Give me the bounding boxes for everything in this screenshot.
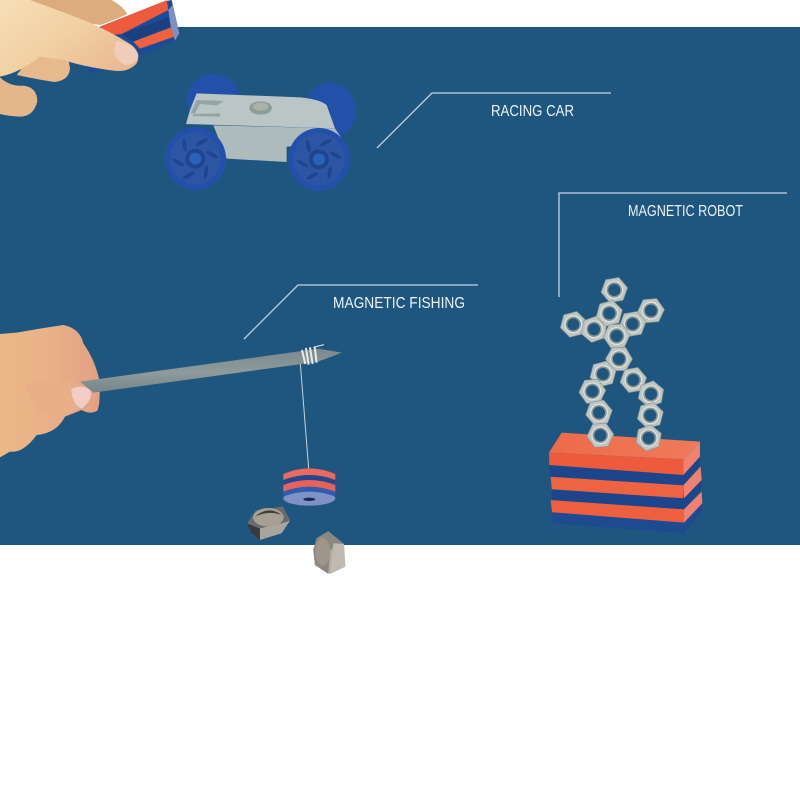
middle magnet	[551, 467, 702, 509]
thumbnail	[71, 387, 91, 409]
bottom magnet	[551, 492, 702, 533]
front right wheel	[288, 128, 350, 191]
thumb	[25, 381, 92, 417]
racing car leader line	[377, 93, 611, 148]
magnetic robot leader line	[559, 193, 787, 297]
blue background panel	[0, 27, 800, 545]
magnetic fishing toy	[0, 325, 345, 574]
magnet stack base	[549, 433, 702, 533]
thumb and palm	[0, 0, 138, 77]
magnetic fishing leader line	[244, 285, 478, 339]
car body front shade	[213, 125, 345, 162]
rear wheels	[187, 74, 356, 139]
car top hole	[249, 101, 272, 115]
bar magnet stack	[85, 0, 179, 74]
magnetic fishing callout	[244, 285, 478, 339]
top magnet	[549, 457, 700, 485]
car grooves	[191, 100, 224, 117]
back of hand	[0, 325, 100, 457]
ring magnet stack	[283, 468, 335, 506]
hex nut two	[313, 531, 345, 574]
magnetic robot callout	[559, 193, 787, 297]
racing car toy	[165, 74, 356, 191]
magnetic robot toy	[549, 273, 702, 533]
hex nut one	[247, 507, 290, 540]
racing car callout	[377, 93, 611, 148]
racing car label: RACING CAR	[491, 103, 574, 120]
magnetic fishing label: MAGNETIC FISHING	[333, 295, 465, 312]
hand holding bar magnets	[0, 0, 179, 117]
car body	[186, 93, 335, 128]
pencil string wrap	[302, 345, 324, 365]
little finger	[0, 77, 37, 117]
front left wheel	[165, 127, 226, 190]
pencil	[80, 345, 342, 393]
index finger	[30, 0, 127, 25]
lower fingers	[17, 50, 70, 82]
thumbnail	[114, 41, 138, 65]
fishing string	[300, 363, 309, 468]
nut robot figure	[559, 273, 667, 453]
magnetic robot label: MAGNETIC ROBOT	[628, 203, 743, 220]
